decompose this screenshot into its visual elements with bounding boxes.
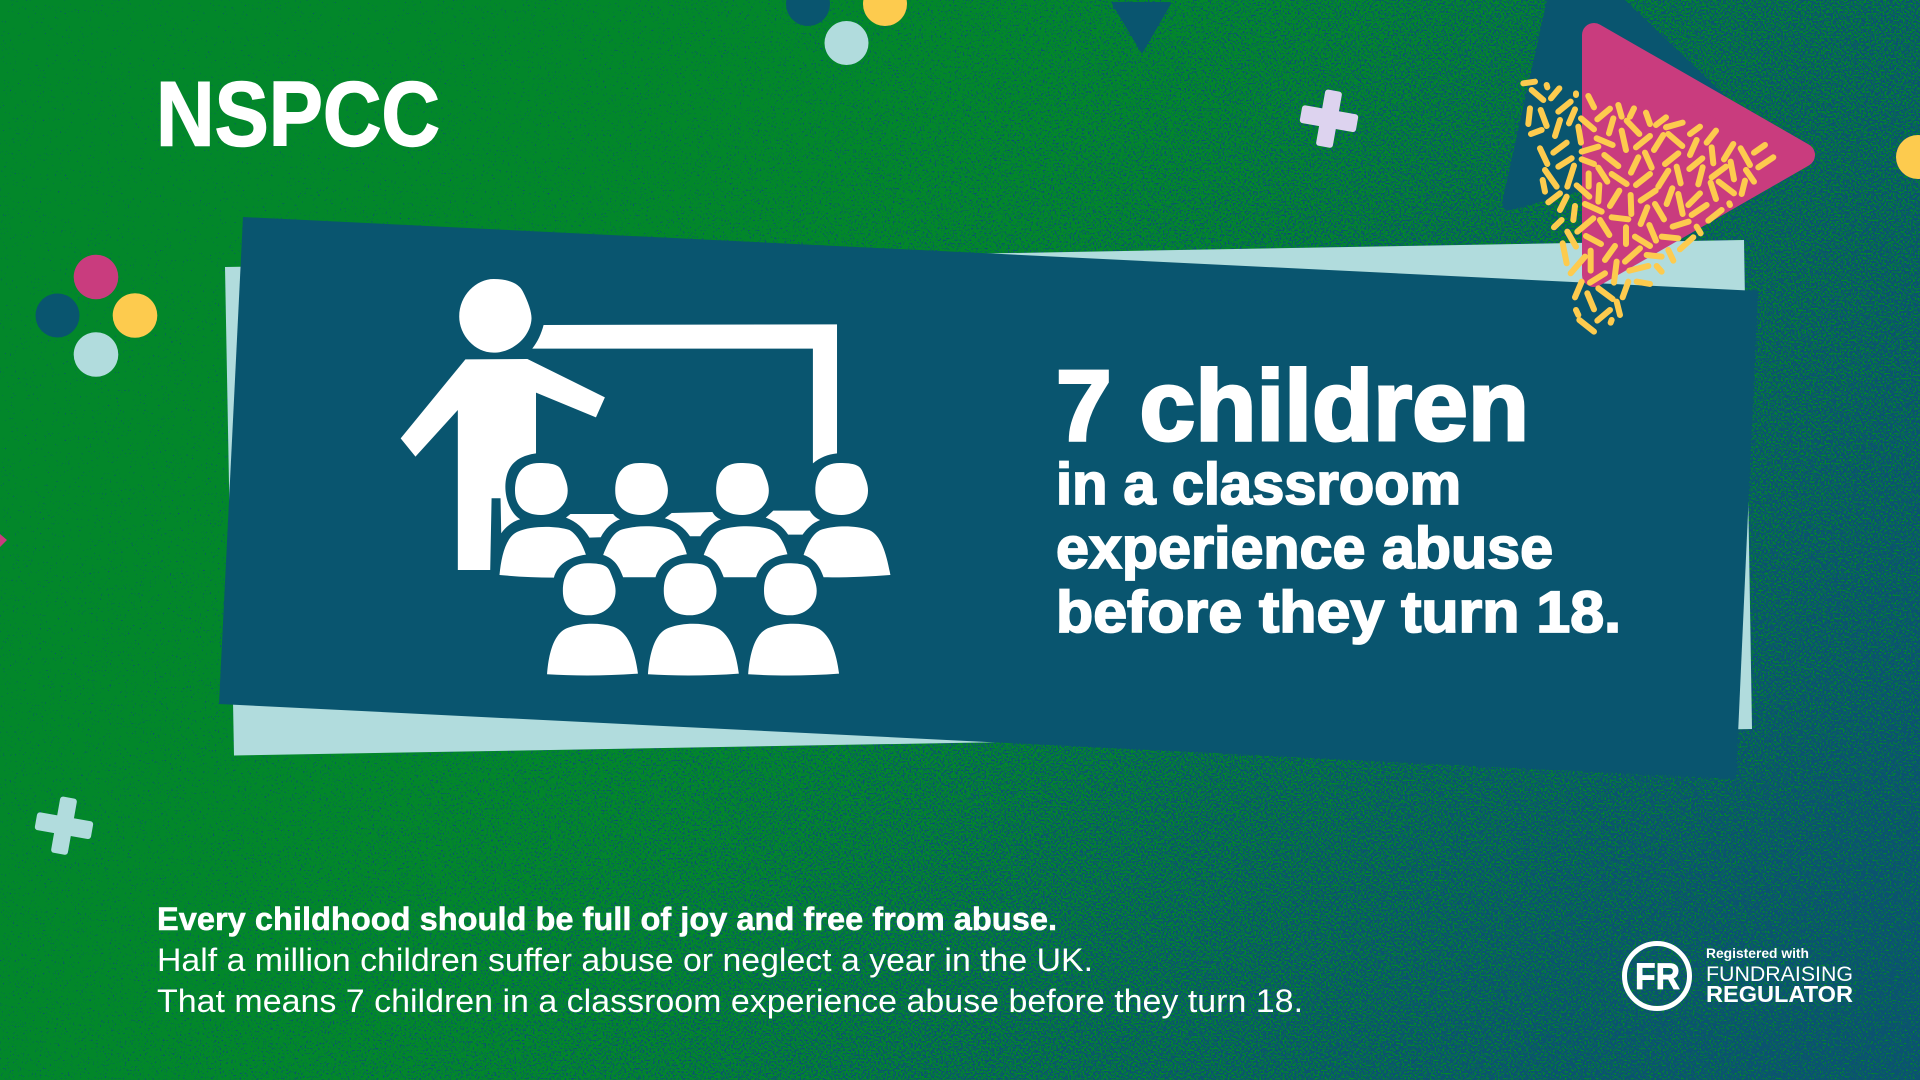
pupils back row bbox=[500, 463, 890, 578]
regulator: REGULATOR bbox=[1706, 981, 1853, 1007]
decoration: lilac plus bbox=[1296, 86, 1362, 152]
decoration: pale green plus bbox=[31, 793, 97, 859]
decoration: dark triangle behind pink bbox=[1502, 0, 1735, 210]
footer bold line: Every childhood should be full of joy and free from abuse. bbox=[157, 901, 1057, 937]
footer line 3: That means 7 children in a classroom experience abuse before they turn 18. bbox=[157, 983, 1303, 1019]
footer text block bbox=[157, 901, 1303, 1019]
decoration: yellow sprinkles bbox=[1523, 82, 1773, 332]
panel: pale backing sheet bbox=[225, 240, 1752, 756]
icon: teacher and pupils in classroom bbox=[401, 279, 890, 675]
logo: NSPCC: NSPCC bbox=[156, 64, 440, 166]
decoration: circles at top bbox=[786, 0, 907, 65]
blackboard bbox=[532, 324, 837, 463]
headline statistic bbox=[1056, 350, 1621, 645]
footer line 2: Half a million children suffer abuse or neglect a year in the UK. bbox=[157, 942, 1093, 978]
subhead line 3: before they turn 18. bbox=[1056, 580, 1621, 645]
subhead line 1: in a classroom bbox=[1056, 452, 1461, 517]
subhead line 2: experience abuse bbox=[1056, 516, 1553, 581]
teacher head bbox=[459, 279, 532, 353]
decoration: yellow circle at right edge bbox=[1896, 135, 1920, 179]
decoration: four circles at left bbox=[36, 255, 157, 377]
FR roundel bbox=[1624, 944, 1690, 1008]
decoration: pink triangle bbox=[1594, 35, 1803, 275]
teacher body bbox=[401, 359, 605, 570]
FR letters: FR bbox=[1635, 956, 1680, 997]
decoration: dark triangle at top bbox=[1112, 2, 1171, 54]
panel: main dark card bbox=[219, 217, 1758, 779]
pupils front row bbox=[547, 563, 839, 675]
headline: 7 children: 7 children bbox=[1056, 350, 1529, 462]
decoration: pink tip at left edge bbox=[0, 534, 7, 547]
fundraising: FUNDRAISING bbox=[1706, 962, 1853, 986]
registered with: Registered with bbox=[1706, 946, 1809, 961]
logo: Fundraising Regulator bbox=[1624, 944, 1853, 1008]
